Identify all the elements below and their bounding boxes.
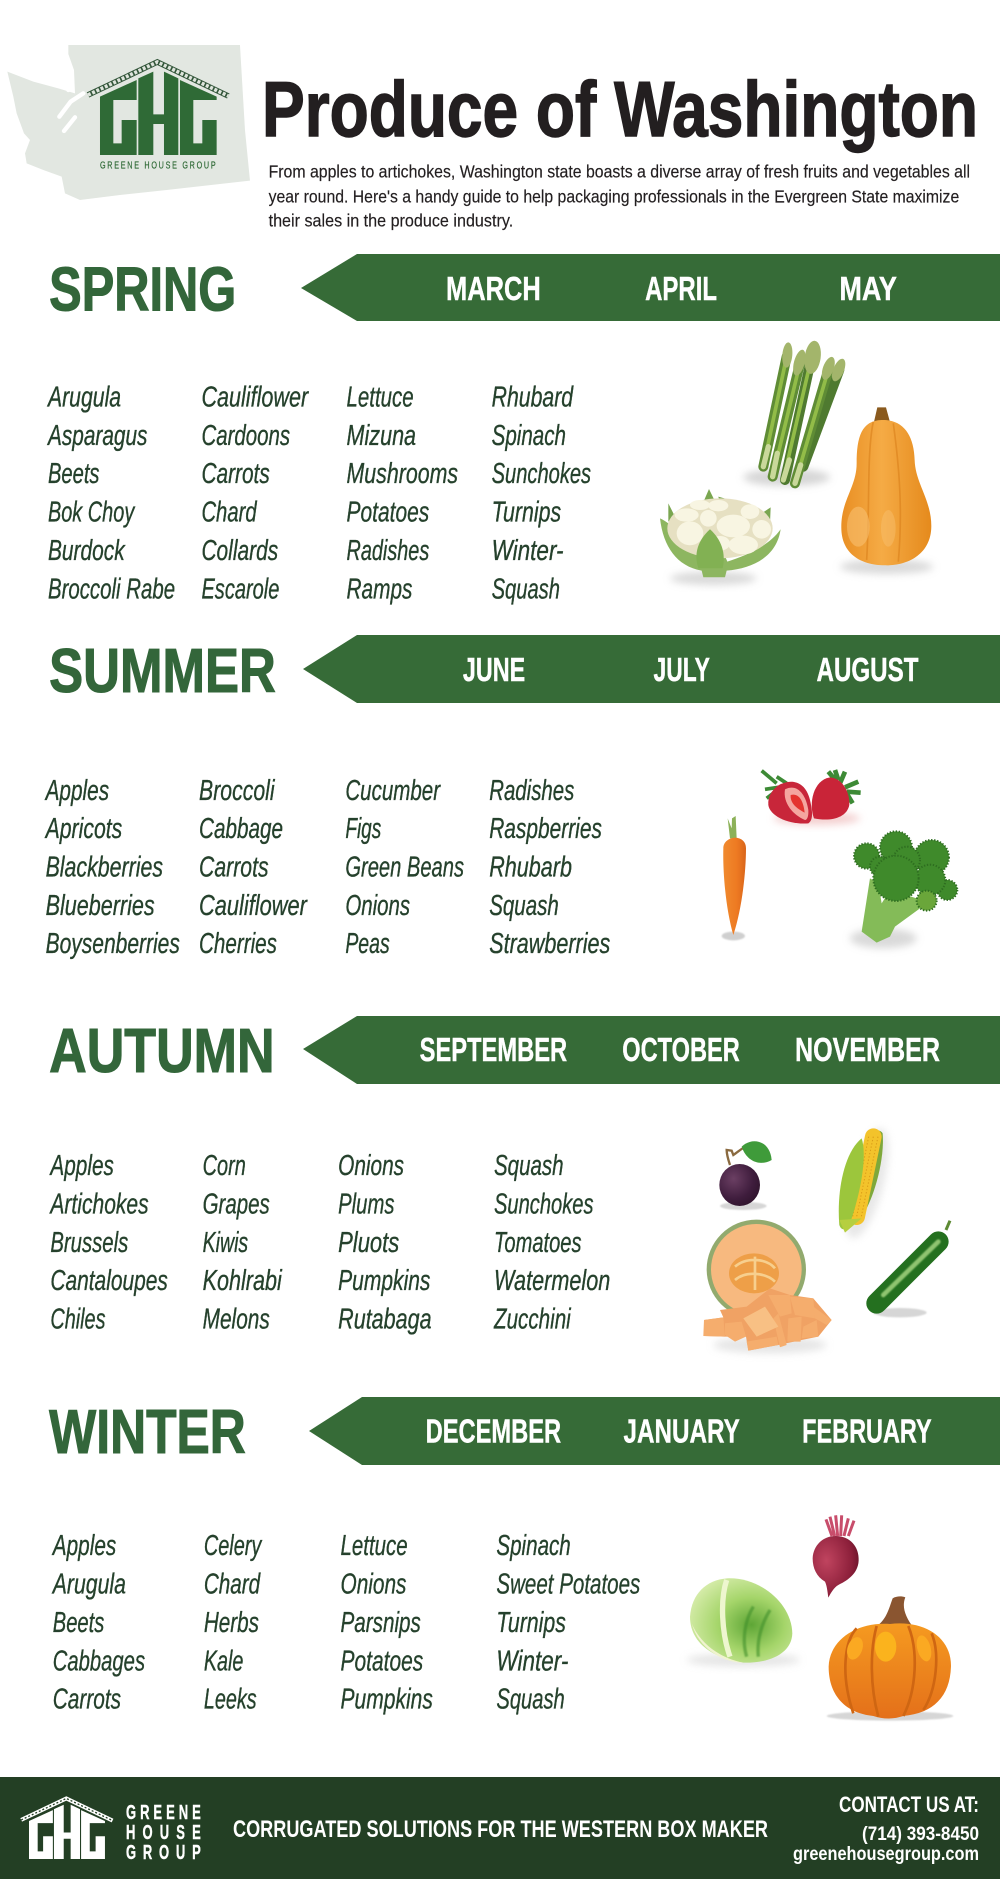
- list: summer produce: Cauliflower: [199, 890, 308, 922]
- list: autumn produce: Corn: [203, 1150, 246, 1182]
- list: spring produce: Spinach: [492, 420, 566, 452]
- list: spring produce: Lettuce: [347, 381, 414, 413]
- list: autumn produce: Artichokes: [49, 1188, 149, 1220]
- intro text: their sales in the produce industry.: [269, 211, 513, 231]
- heading: winter: WINTER: [49, 1398, 246, 1467]
- list: winter produce: Squash: [496, 1684, 565, 1716]
- list: winter produce: Sweet Potatoes: [496, 1569, 640, 1601]
- list: spring produce: Sunchokes: [492, 458, 591, 490]
- list: summer produce: Blueberries: [46, 890, 155, 922]
- list: autumn produce: Chiles: [50, 1304, 106, 1336]
- icon: cabbage: [690, 1578, 792, 1663]
- footer wordmark: GREENE: [126, 1801, 201, 1824]
- list: summer produce: [44, 775, 610, 960]
- list: spring produce: Turnips: [492, 497, 561, 529]
- list: autumn produce: Rutabaga: [338, 1304, 432, 1336]
- list: spring produce: Cardoons: [201, 420, 290, 452]
- list: autumn produce: Watermelon: [494, 1265, 610, 1297]
- list: spring produce: Collards: [201, 535, 278, 567]
- list: spring produce: Mushrooms: [347, 458, 458, 490]
- list: autumn produce: Plums: [338, 1188, 394, 1220]
- list: winter produce: Parsnips: [341, 1607, 421, 1639]
- list: autumn produce: Brussels: [50, 1227, 128, 1259]
- list: winter produce: Spinach: [496, 1530, 571, 1562]
- list: winter produce: Celery: [204, 1530, 263, 1562]
- icon: beet: [813, 1515, 859, 1598]
- ribbon: winter months: [309, 1397, 1000, 1465]
- list: autumn produce: Onions: [338, 1150, 404, 1182]
- list: spring produce: Chard: [201, 497, 257, 529]
- list: summer produce: Raspberries: [489, 813, 602, 845]
- ribbon: summer months: [303, 635, 1000, 703]
- panel: autumn: [49, 1016, 1000, 1353]
- list: spring produce: Beets: [48, 458, 100, 490]
- list: summer produce: Green Beans: [345, 851, 464, 883]
- icon: cauliflower: [660, 518, 781, 577]
- illustration: spring vegetables: [660, 340, 933, 585]
- list: spring produce: Escarole: [201, 573, 279, 605]
- list: summer produce: Figs: [345, 813, 381, 845]
- logo caption: GREENE HOUSE GROUP: [100, 159, 216, 171]
- list: autumn produce: Squash: [494, 1150, 564, 1182]
- list: summer produce: Strawberries: [489, 928, 610, 960]
- icon: cucumber: [877, 1221, 950, 1303]
- list: autumn produce: Grapes: [203, 1188, 270, 1220]
- ribbon: spring months: [301, 254, 1000, 321]
- illustration: summer produce: [722, 770, 957, 948]
- panel: summer: [44, 635, 1000, 960]
- icon: corn: [839, 1131, 883, 1233]
- list: spring produce: Arugula: [46, 381, 121, 413]
- list: spring produce: Cauliflower: [201, 381, 309, 413]
- ribbon: summer months: AUGUST: [817, 652, 919, 689]
- ribbon: spring months: MAY: [839, 271, 897, 308]
- contact details: [793, 1792, 979, 1865]
- illustration: autumn produce: [703, 1124, 950, 1353]
- list: autumn produce: Kiwis: [203, 1227, 248, 1259]
- list: spring produce: Ramps: [347, 573, 412, 605]
- list: summer produce: Cabbage: [199, 813, 283, 845]
- ribbon: winter months: DECEMBER: [426, 1413, 561, 1450]
- list: autumn produce: Pumpkins: [338, 1265, 430, 1297]
- list: summer produce: Carrots: [199, 851, 269, 883]
- list: spring produce: Winter-: [492, 535, 564, 567]
- list: summer produce: Squash: [489, 890, 559, 922]
- ribbon: winter months: FEBRUARY: [802, 1413, 932, 1450]
- icon: plum: [719, 1141, 772, 1206]
- list: winter produce: Arugula: [51, 1569, 126, 1601]
- list: summer produce: Cucumber: [345, 775, 441, 807]
- list: summer produce: Peas: [345, 928, 390, 960]
- list: winter produce: Beets: [53, 1607, 104, 1639]
- list: winter produce: Pumpkins: [341, 1684, 433, 1716]
- list: summer produce: Boysenberries: [46, 928, 180, 960]
- intro text: [269, 161, 970, 231]
- ribbon: autumn months: [303, 1016, 1000, 1084]
- list: autumn produce: [49, 1150, 610, 1336]
- list: spring produce: Carrots: [201, 458, 270, 490]
- ribbon: autumn months: OCTOBER: [622, 1032, 740, 1069]
- roof truss: [88, 62, 228, 96]
- icon: asparagus: [763, 340, 848, 483]
- illustration: winter produce: [687, 1515, 953, 1721]
- list: winter produce: Apples: [51, 1530, 116, 1562]
- Washington state silhouette: [7, 45, 250, 200]
- list: winter produce: Onions: [341, 1569, 406, 1601]
- list: spring produce: Asparagus: [47, 420, 147, 452]
- list: autumn produce: Sunchokes: [494, 1188, 594, 1220]
- list: summer produce: Blackberries: [46, 851, 163, 883]
- footer band: [0, 1777, 1000, 1879]
- heading: autumn: AUTUMN: [49, 1017, 275, 1086]
- list: autumn produce: Tomatoes: [494, 1227, 582, 1259]
- icon: cantaloupe: [703, 1220, 832, 1351]
- list: spring produce: Broccoli Rabe: [48, 573, 175, 605]
- list: autumn produce: Cantaloupes: [50, 1265, 168, 1297]
- list: spring produce: Mizuna: [347, 420, 416, 452]
- icon: strawberries: [762, 770, 861, 824]
- ribbon: spring months: APRIL: [645, 271, 717, 308]
- list: winter produce: Potatoes: [341, 1645, 423, 1677]
- list: winter produce: Herbs: [204, 1607, 259, 1639]
- ribbon: autumn months: SEPTEMBER: [420, 1032, 567, 1069]
- footer wordmark: GROUP: [126, 1841, 201, 1864]
- ribbon: summer months: JUNE: [463, 652, 525, 689]
- heading: summer: SUMMER: [49, 637, 276, 706]
- list: winter produce: Turnips: [496, 1607, 566, 1639]
- panel: winter: [49, 1397, 1000, 1721]
- logo: Greene House Group on Washington silhouette: [7, 45, 250, 200]
- list: winter produce: Kale: [204, 1645, 243, 1677]
- icon: carrot: [728, 816, 737, 838]
- list: winter produce: Lettuce: [341, 1530, 408, 1562]
- list: autumn produce: Kohlrabi: [203, 1265, 283, 1297]
- ribbon: spring months: MARCH: [446, 271, 541, 308]
- icon: pumpkin: [829, 1596, 951, 1718]
- list: winter produce: Carrots: [53, 1684, 121, 1716]
- list: spring produce: Radishes: [347, 535, 429, 567]
- icon: butternut squash: [874, 407, 890, 422]
- list: winter produce: Cabbages: [53, 1645, 145, 1677]
- panel: spring: [46, 254, 1000, 605]
- list: summer produce: Cherries: [199, 928, 277, 960]
- GHG letters: [100, 72, 217, 155]
- footer logo: [21, 1798, 113, 1859]
- list: spring produce: [46, 381, 591, 605]
- list: winter produce: Winter-: [496, 1645, 568, 1677]
- contact details: (714) 393-8450: [862, 1824, 979, 1845]
- list: spring produce: Rhubard: [492, 381, 574, 413]
- list: winter produce: Leeks: [204, 1684, 257, 1716]
- list: summer produce: Rhubarb: [489, 851, 572, 883]
- list: summer produce: Apples: [44, 775, 109, 807]
- list: summer produce: Radishes: [489, 775, 574, 807]
- list: autumn produce: Pluots: [338, 1227, 399, 1259]
- list: spring produce: Bok Choy: [48, 497, 135, 529]
- list: summer produce: Broccoli: [199, 775, 276, 807]
- footer wordmark: [126, 1801, 201, 1864]
- list: summer produce: Apricots: [44, 813, 122, 845]
- list: autumn produce: Melons: [203, 1304, 270, 1336]
- ribbon: autumn months: NOVEMBER: [795, 1032, 940, 1069]
- list: spring produce: Burdock: [48, 535, 126, 567]
- list: autumn produce: Zucchini: [493, 1304, 572, 1336]
- footer wordmark: HOUSE: [126, 1821, 201, 1844]
- list: winter produce: [51, 1530, 640, 1716]
- heading: spring: SPRING: [49, 256, 236, 325]
- list: winter produce: Chard: [204, 1569, 261, 1601]
- list: autumn produce: Apples: [49, 1150, 114, 1182]
- ribbon: winter months: JANUARY: [624, 1413, 740, 1450]
- footer tagline: CORRUGATED SOLUTIONS FOR THE WESTERN BOX MAKER: [233, 1816, 768, 1843]
- icon: broccoli: [854, 831, 957, 943]
- list: spring produce: Squash: [492, 573, 560, 605]
- ribbon: summer months: JULY: [653, 652, 710, 689]
- list: spring produce: Potatoes: [347, 497, 429, 529]
- list: summer produce: Onions: [345, 890, 410, 922]
